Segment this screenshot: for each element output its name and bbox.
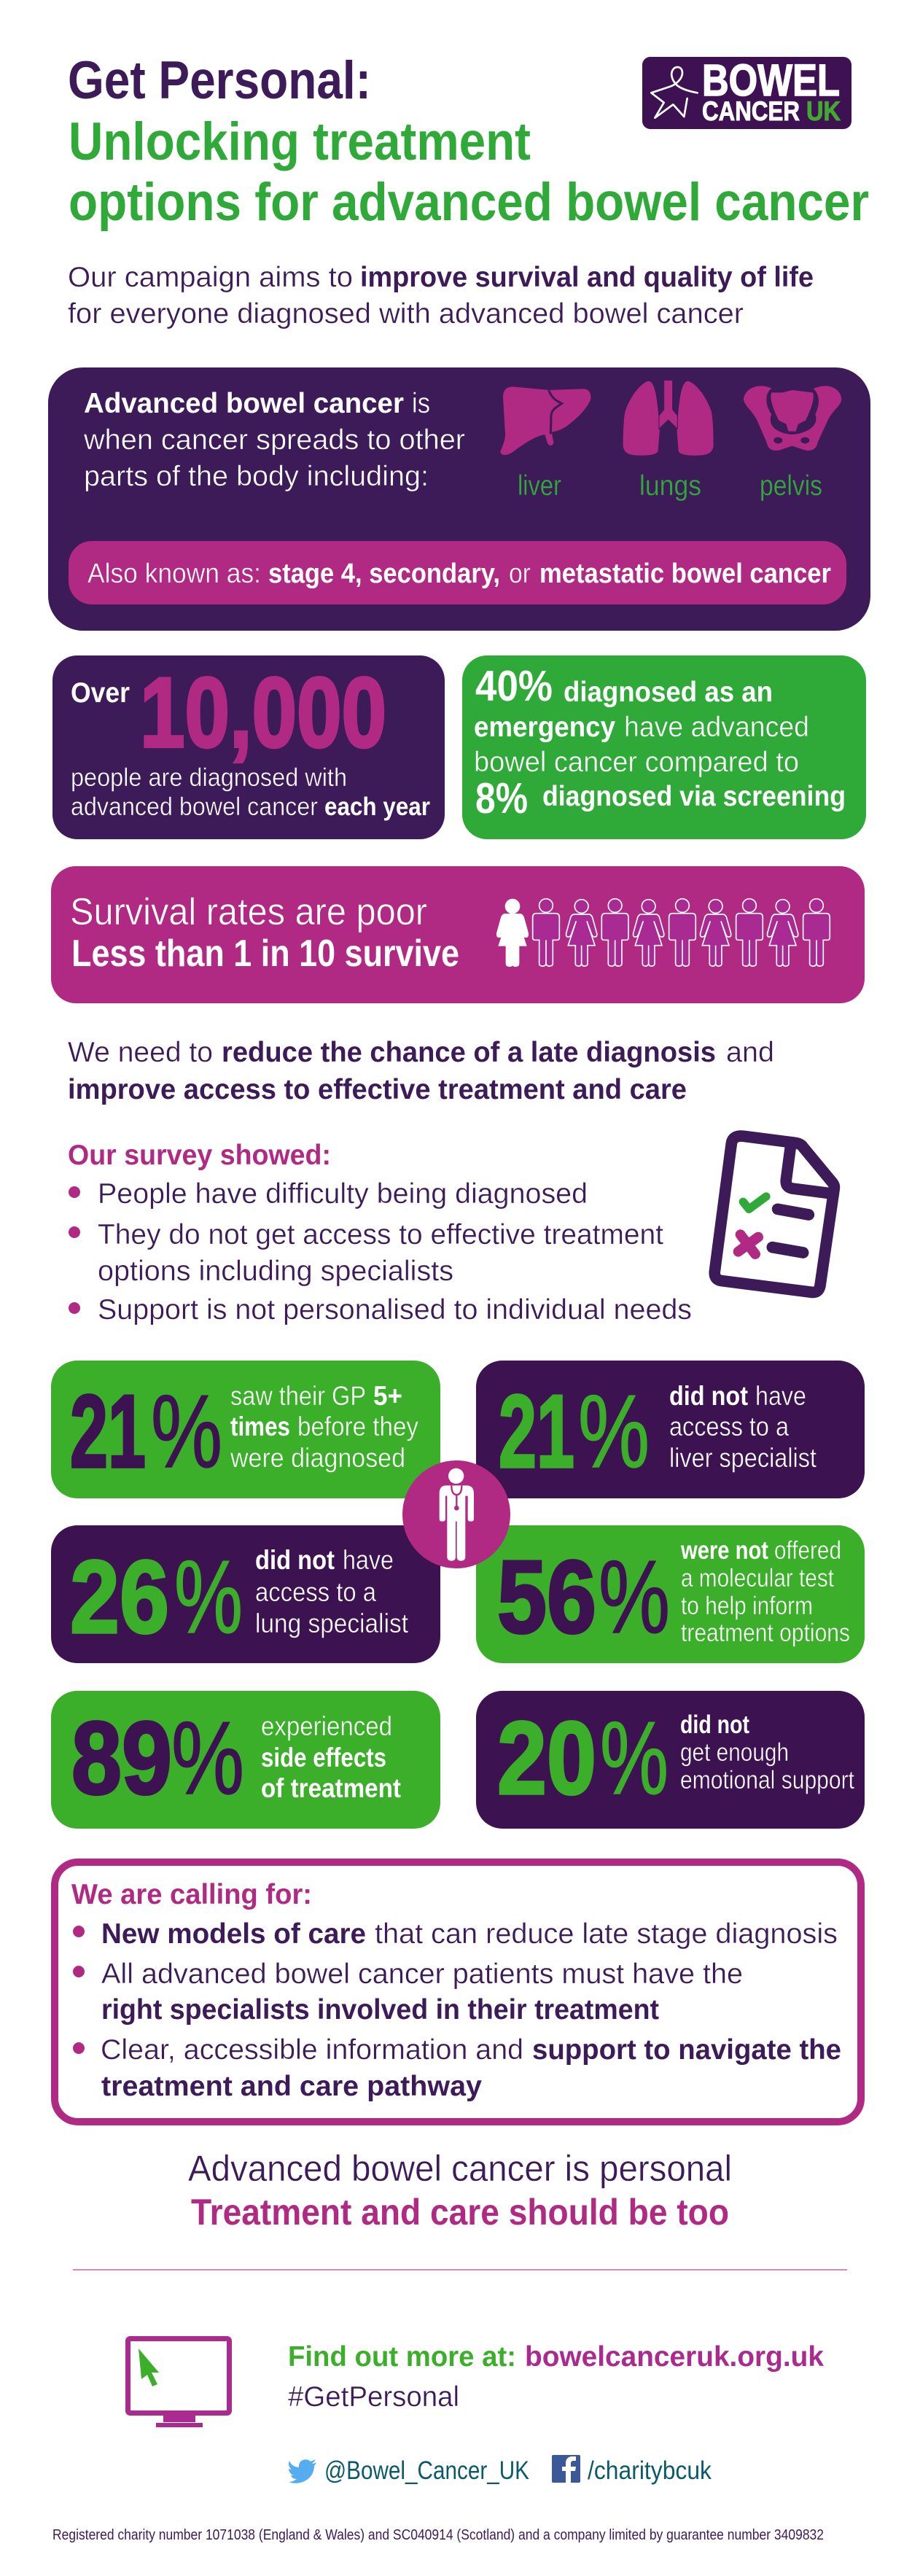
survey findings list: They do not get access to effective treatment bbox=[98, 1219, 663, 1250]
icon: twitter bbox=[289, 2459, 316, 2483]
icon: liver bbox=[500, 386, 591, 455]
survey findings list bbox=[68, 1140, 692, 1326]
stat card: 89% side effects bbox=[51, 1691, 440, 1829]
stat card: 21% liver specialist: % bbox=[578, 1374, 650, 1490]
panel: 40% diagnosed as emergency: emergency bbox=[474, 712, 615, 743]
stat card: 21% GP visits bbox=[51, 1361, 440, 1498]
panel: we are calling for bbox=[55, 1862, 861, 2122]
also known as pill: Also known as: bbox=[87, 559, 261, 589]
panel: 40% diagnosed as emergency bbox=[462, 655, 866, 839]
stat card: 56% molecular test: treatment options bbox=[681, 1619, 850, 1647]
stat card: 56% molecular test: 56 bbox=[497, 1539, 596, 1655]
intro text: improve survival and quality of life bbox=[360, 262, 814, 293]
stat card: 89% side effects: experienced bbox=[261, 1711, 392, 1741]
stat card: 26% lung specialist: % bbox=[174, 1539, 243, 1655]
find out more: #GetPersonal bbox=[288, 2381, 459, 2413]
twitter handle: @Bowel_Cancer_UK bbox=[324, 2456, 529, 2485]
stat card: 21% GP visits: % bbox=[151, 1374, 222, 1490]
icon: lungs bbox=[623, 380, 714, 456]
stat card: 26% lung specialist bbox=[51, 1525, 440, 1663]
panel: we are calling for: that can reduce late stage diagnosis bbox=[375, 1918, 838, 1950]
logo: Bowel Cancer UK: CANCER bbox=[702, 96, 800, 126]
logo: Bowel Cancer UK bbox=[642, 55, 851, 129]
title: Get Personal: bbox=[68, 51, 371, 110]
find out more bbox=[288, 2341, 824, 2413]
stat card: 56% molecular test: to help inform bbox=[681, 1592, 813, 1620]
also known as pill: metastatic bowel cancer bbox=[539, 559, 831, 589]
panel: we are calling for: New models of care bbox=[101, 1918, 366, 1950]
text: we need to reduce: and bbox=[726, 1037, 774, 1068]
stat card: 21% liver specialist bbox=[476, 1361, 865, 1498]
stat card: 26% lung specialist: did not bbox=[255, 1545, 335, 1575]
stat card: 21% GP visits: before they bbox=[297, 1412, 418, 1441]
panel: 40% diagnosed as emergency: diagnosed via screening bbox=[542, 781, 846, 812]
organ labels: pelvis bbox=[760, 470, 822, 502]
panel: we are calling for: All advanced bowel cancer patients must have the bbox=[101, 1958, 743, 1990]
text: we need to reduce: reduce the chance of a late diagnosis bbox=[222, 1037, 716, 1068]
stat card: 21% GP visits: 21 bbox=[70, 1374, 146, 1490]
panel: we are calling for: We are calling for: bbox=[71, 1879, 312, 1910]
panel: 40% diagnosed as emergency: have advanced bbox=[624, 712, 809, 743]
icon: pelvis bbox=[744, 386, 841, 451]
text: we need to reduce: improve access to effective treatment and care bbox=[68, 1074, 687, 1105]
stat card: 20% emotional support: 20 bbox=[497, 1700, 596, 1816]
panel: 40% diagnosed as emergency: bowel cancer compared to bbox=[474, 747, 799, 778]
panel: we are calling for: treatment and care pathway bbox=[101, 2071, 482, 2102]
panel: we are calling for: right specialists involved in their treatment bbox=[101, 1994, 659, 2026]
stat card: 21% liver specialist: did not bbox=[669, 1381, 748, 1411]
panel: over 10,000: people are diagnosed with bbox=[71, 763, 347, 792]
also known as pill bbox=[69, 541, 846, 604]
find out more: Find out more at: bbox=[288, 2341, 516, 2373]
stat card: 89% side effects: % bbox=[171, 1700, 244, 1816]
panel: 40% diagnosed as emergency: 8% bbox=[475, 774, 528, 822]
stat card: 89% side effects: side effects bbox=[261, 1743, 386, 1773]
panel: 40% diagnosed as emergency: diagnosed as an bbox=[564, 677, 773, 708]
stat card: 21% GP visits: 5+ bbox=[373, 1381, 402, 1411]
icon: doctor in circle bbox=[402, 1460, 510, 1568]
intro text bbox=[68, 262, 814, 330]
survival text: Less than 1 in 10 survive bbox=[71, 933, 459, 975]
panel: we are calling for: support to navigate the bbox=[532, 2034, 841, 2066]
icon: survey document bbox=[714, 1136, 834, 1292]
text: we need to reduce: We need to bbox=[68, 1037, 213, 1068]
definition text: is bbox=[412, 388, 430, 419]
panel: over 10,000: Over bbox=[71, 677, 130, 709]
organ labels: lungs bbox=[639, 470, 701, 502]
survey findings list: People have difficulty being diagnosed bbox=[98, 1178, 588, 1210]
panel: over 10,000: each year bbox=[324, 793, 430, 821]
stat card: 20% emotional support: % bbox=[600, 1700, 669, 1816]
stat card: 89% side effects: of treatment bbox=[261, 1773, 401, 1803]
also known as pill: or bbox=[509, 559, 531, 589]
stat card: 56% molecular test bbox=[476, 1525, 865, 1663]
icon row: 1 in 10 people bbox=[497, 899, 830, 966]
icon: cursor bbox=[139, 2349, 159, 2386]
organ labels bbox=[518, 470, 822, 502]
closing statement bbox=[188, 2148, 732, 2233]
survival text bbox=[70, 891, 459, 975]
closing statement: Advanced bowel cancer is personal bbox=[188, 2148, 732, 2189]
intro text: Our campaign aims to bbox=[68, 262, 353, 293]
also known as pill: stage 4, secondary, bbox=[268, 559, 500, 589]
survey findings list: options including specialists bbox=[98, 1256, 453, 1287]
panel: over 10,000: advanced bowel cancer bbox=[71, 793, 318, 821]
stat card: 26% lung specialist: 26 bbox=[70, 1539, 169, 1655]
stat card: 20% emotional support: emotional support bbox=[680, 1766, 854, 1794]
stat card: 56% molecular test: were not bbox=[680, 1536, 768, 1565]
intro text: for everyone diagnosed with advanced bowel cancer bbox=[68, 298, 744, 330]
icon: computer monitor bbox=[128, 2339, 229, 2427]
panel: over 10,000 bbox=[52, 655, 445, 839]
survey findings list: Our survey showed: bbox=[68, 1140, 331, 1171]
find out more: bowelcanceruk.org.uk bbox=[525, 2341, 824, 2373]
stat card: 20% emotional support: did not bbox=[680, 1711, 749, 1739]
panel: 40% diagnosed as emergency: 40% bbox=[475, 662, 553, 710]
stat card: 56% molecular test: a molecular test bbox=[681, 1564, 834, 1592]
definition text: parts of the body including: bbox=[84, 461, 429, 492]
stat card: 20% emotional support bbox=[476, 1691, 865, 1829]
facebook handle: /charitybcuk bbox=[588, 2456, 712, 2485]
stat card: 26% lung specialist: access to a bbox=[255, 1577, 376, 1607]
definition text: Advanced bowel cancer bbox=[84, 388, 404, 419]
panel: survival rates bbox=[51, 866, 865, 1003]
stat card: 26% lung specialist: lung specialist bbox=[255, 1608, 409, 1638]
closing statement: Treatment and care should be too bbox=[191, 2192, 729, 2233]
stat card: 56% molecular test: % bbox=[599, 1539, 670, 1655]
stat card: 56% molecular test: offered bbox=[774, 1536, 841, 1565]
panel: over 10,000: 10,000 bbox=[140, 657, 386, 768]
stat card: 21% liver specialist: liver specialist bbox=[669, 1443, 817, 1473]
logo: Bowel Cancer UK: UK bbox=[806, 96, 841, 126]
organ labels: liver bbox=[518, 470, 561, 502]
stat card: 21% GP visits: times bbox=[230, 1412, 290, 1441]
definition text bbox=[83, 388, 465, 492]
stat card: 21% GP visits: saw their GP bbox=[230, 1381, 366, 1411]
stat card: 26% lung specialist: have bbox=[343, 1545, 394, 1575]
definition text: when cancer spreads to other bbox=[83, 424, 465, 456]
panel: we are calling for: Clear, accessible information and bbox=[101, 2034, 523, 2066]
stat card: 21% liver specialist: 21 bbox=[499, 1374, 574, 1490]
survey findings list: Support is not personalised to individual needs bbox=[98, 1294, 692, 1326]
stat card: 21% GP visits: were diagnosed bbox=[230, 1443, 405, 1473]
stat card: 89% side effects: 89 bbox=[71, 1700, 172, 1816]
title bbox=[68, 51, 869, 232]
stat card: 20% emotional support: get enough bbox=[680, 1738, 789, 1767]
stat card: 21% liver specialist: access to a bbox=[669, 1412, 789, 1441]
footer: charity registration: Registered charity number 1071038 (England & Wales) and SC040914 (Scotland) and a company limited by guarantee number 3409832 bbox=[52, 2527, 824, 2543]
stat card: 21% liver specialist: have bbox=[755, 1381, 806, 1411]
icon: facebook bbox=[552, 2455, 580, 2483]
survival text: Survival rates are poor bbox=[70, 891, 427, 933]
panel: what is advanced bowel cancer bbox=[48, 367, 870, 631]
title: Unlocking treatment bbox=[69, 112, 531, 171]
text: we need to reduce bbox=[68, 1037, 774, 1105]
logo: Bowel Cancer UK: BOWEL bbox=[702, 55, 840, 105]
